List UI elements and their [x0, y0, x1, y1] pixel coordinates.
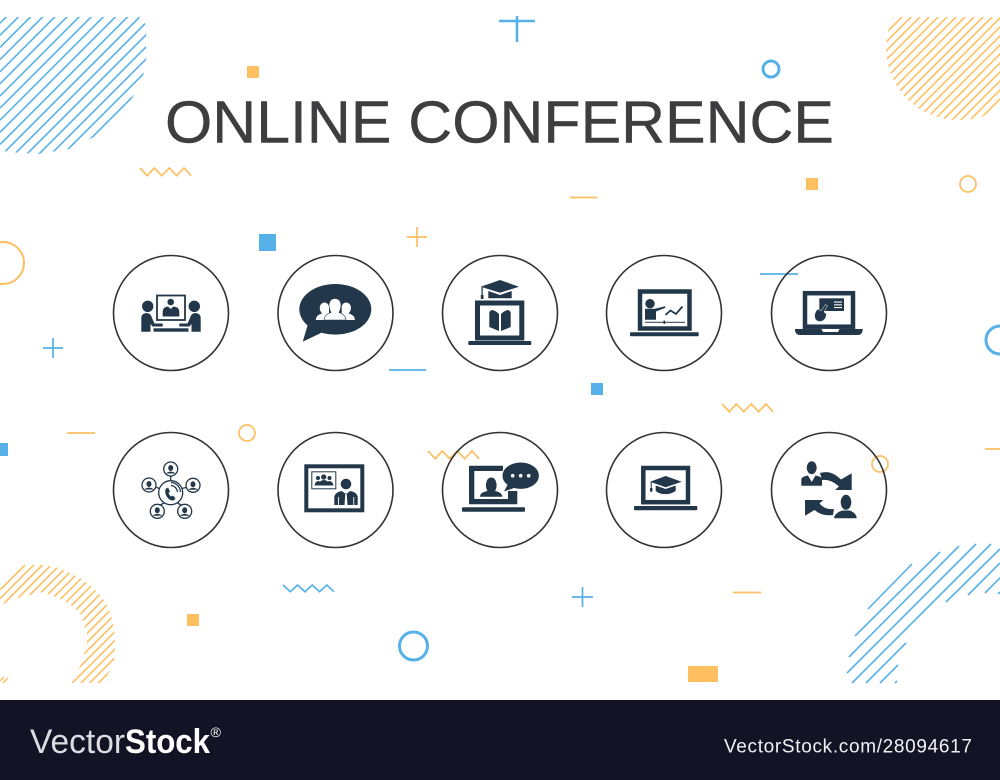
logo: ®	[210, 724, 222, 740]
icon: conference call network	[114, 432, 228, 548]
icon: laptop with hand touching screen	[772, 256, 886, 370]
icon: laptop with graduation cap	[606, 432, 722, 548]
icon: laptop with graduation cap and book	[442, 256, 558, 370]
logo	[30, 723, 222, 761]
icon: people exchange arrows	[772, 432, 886, 548]
title: ONLINE CONFERENCE	[165, 88, 834, 156]
icon: video meeting	[114, 256, 228, 370]
icon: presenter with remote group on screen	[278, 432, 393, 548]
hatched blob: top left	[0, 17, 146, 154]
hatched band: bottom right	[847, 544, 1000, 683]
icon: group speech bubble	[278, 256, 393, 370]
logo: Stock	[125, 723, 210, 761]
icon: laptop user with chat bubble	[442, 432, 558, 548]
hatched fragments: bottom left corner	[0, 677, 8, 683]
hatched ring: bottom left	[0, 565, 115, 683]
logo: Vector	[30, 723, 125, 761]
image id text: VectorStock.com/28094617	[724, 736, 972, 758]
hatched circle: top right	[886, 17, 1000, 120]
icon: laptop with presenter and chart	[606, 256, 722, 370]
footer bar	[0, 700, 1000, 780]
